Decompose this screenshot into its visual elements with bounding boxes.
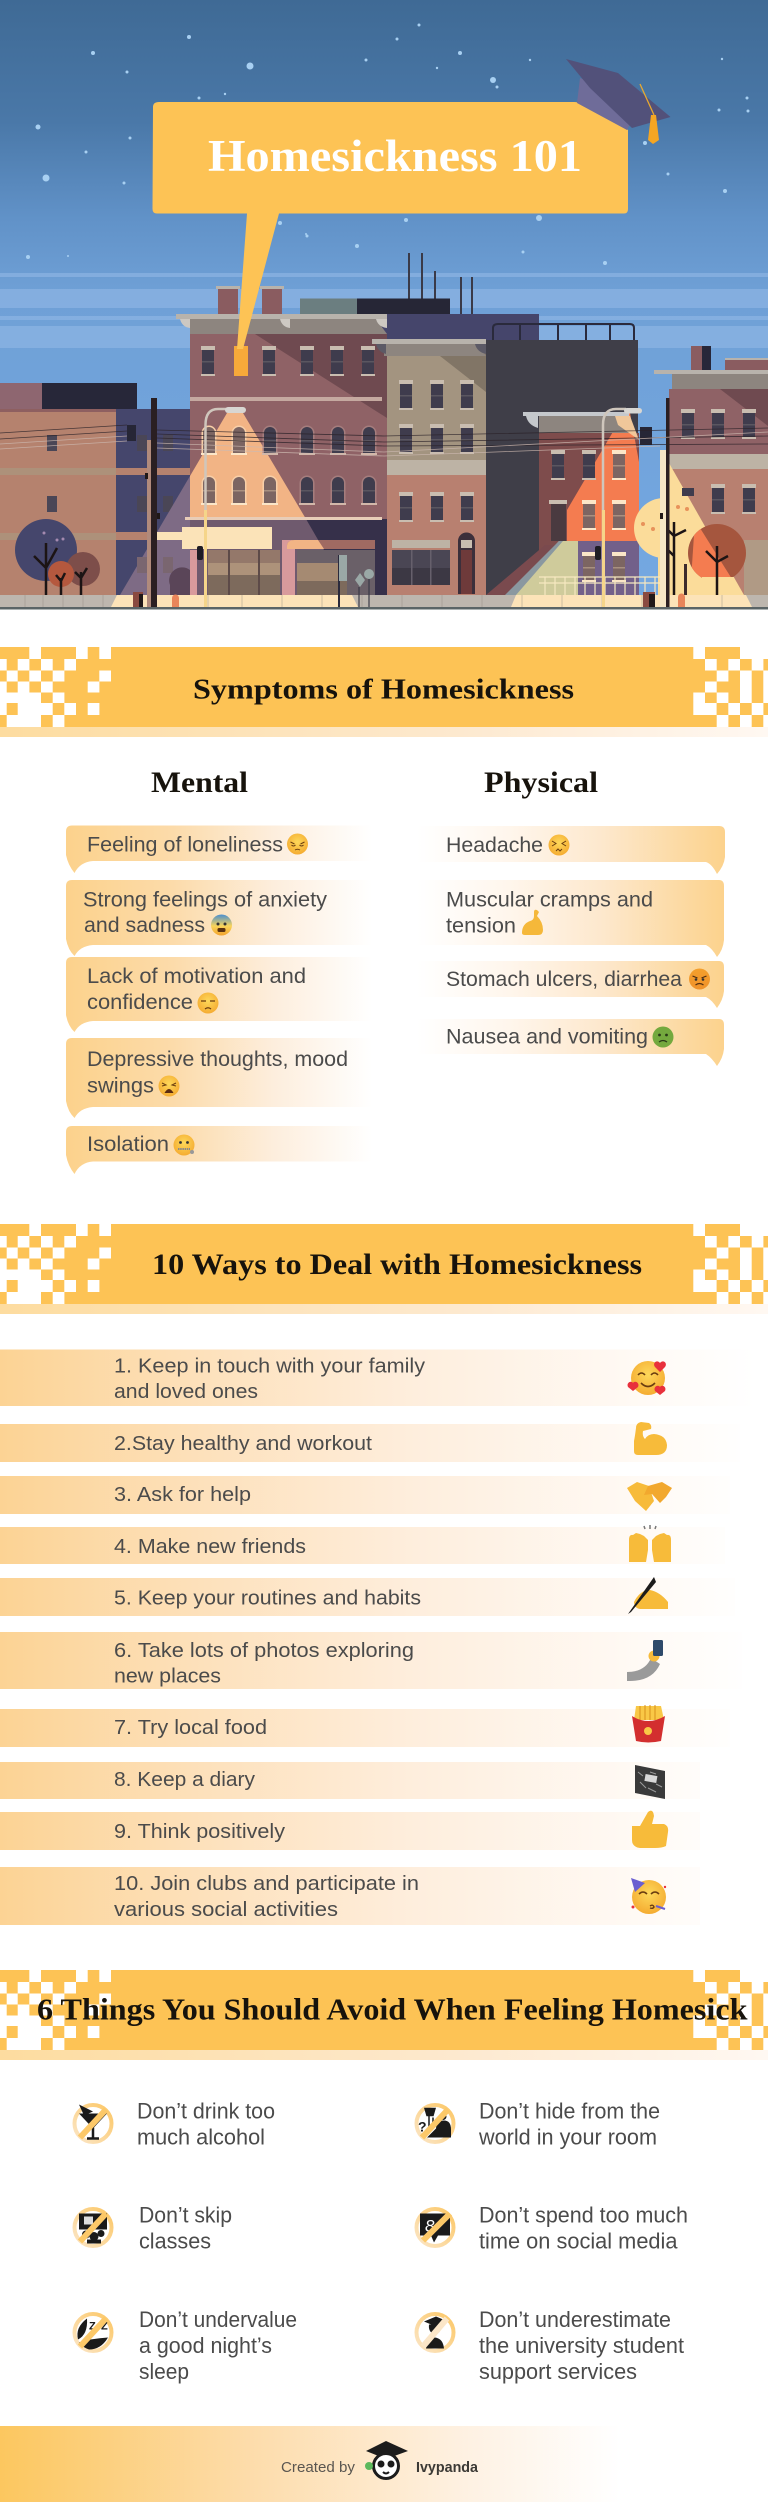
item: skip classes: classes [139,2228,211,2254]
right trees [668,520,746,595]
hydrants and bins [133,555,685,607]
antennae [408,253,473,315]
icon: no hiding in room: ? [418,2118,427,2134]
street light cone left [120,413,306,595]
panel: 10 ways to deal with homesickness [0,1224,768,1925]
row 6: new places [114,1664,221,1688]
item: sleep [74,2307,297,2384]
bubble: muscular cramps: Muscular cramps and [446,888,653,912]
chimneys [216,286,284,315]
steps and lit stoop [486,541,578,595]
emoji: french fries [632,1705,665,1742]
emoji: smiling face with hearts [628,1361,666,1395]
item: support services: support services [479,2359,637,2384]
item: sleep: Don’t undervalue [139,2307,297,2332]
right street light cone ground [634,450,694,595]
icon: no social media [416,2209,454,2246]
icon: no skipping classes [74,2209,112,2246]
bubble: depressive thoughts [66,1038,372,1118]
emoji: unamused [198,992,218,1014]
panel: 6 things to avoid [0,1970,768,2384]
item: hide from world: world in your room [478,2124,657,2150]
emoji: notebook [635,1765,665,1799]
emoji: confounded [548,834,570,856]
item: sleep: a good night’s [139,2333,272,2358]
emoji: partying face [631,1878,666,1914]
main brick building [176,314,387,596]
heading: mental: Mental [151,766,248,799]
storefront [157,517,387,596]
bubble: anxiety: Strong feelings of anxiety [83,888,328,912]
emoji: writing hand [628,1577,668,1614]
emoji: handshake [627,1482,672,1511]
item: skip classes [74,2202,232,2254]
emoji: anxious sweat [211,914,232,936]
row 7: 7. Try local food [114,1716,267,1739]
icon: no sleep neglect: Z [101,2320,108,2332]
credit text: Created by [281,2459,356,2476]
heading: symptoms: Symptoms of Homesickness [193,674,574,706]
row 7 [0,1705,730,1747]
main building upper windows [201,346,375,376]
bubble: loneliness: Feeling of loneliness [87,834,283,856]
fence [539,577,661,595]
purple and salmon buildings left [0,383,190,595]
overhead wires [0,425,768,456]
bubble: nausea [417,1019,724,1066]
heading: physical: Physical [484,766,598,799]
emoji: zipper mouth [174,1134,194,1156]
emoji: weary [158,1076,180,1096]
icon: no alcohol [74,2104,112,2142]
icon: no social media: 8 [425,2216,435,2236]
item: social media: Don’t spend too much [479,2202,688,2228]
row 5 [0,1577,735,1616]
bubble: motivation: confidence [87,991,193,1014]
row 6 [0,1632,742,1689]
bubble: isolation: Isolation [87,1133,169,1156]
street lamp left [197,407,246,607]
row 10 [0,1867,700,1925]
row 2: 2.Stay healthy and workout [114,1432,372,1455]
bubble: loneliness [66,826,372,873]
icon: ivypanda logo [365,2441,408,2478]
row 1: 1. Keep in touch with your family [114,1354,426,1378]
bubble: anxiety [66,880,372,956]
rooftop railing [493,324,634,340]
bubble: depressive thoughts: swings [87,1074,154,1098]
bubble: nausea: Nausea and vomiting [446,1026,648,1048]
bubble: muscular cramps: tension [446,914,516,938]
sky bands [0,273,768,348]
item: support services: the university student [479,2333,684,2358]
bubble: motivation [66,957,372,1032]
speech bubble with title [152,102,628,349]
bubble: headache: Headache [446,834,543,857]
row 6: 6. Take lots of photos exploring [114,1639,414,1662]
row 1 [0,1350,755,1406]
bubble: isolation [66,1126,372,1174]
icon: graduation cap with tassel [566,59,670,144]
row 10: 10. Join clubs and participate in [114,1872,419,1895]
title: Homesickness 101 [208,131,582,181]
section header band: 10 ways [0,1224,768,1314]
row 4 [0,1525,725,1564]
row 1: and loved ones [114,1380,258,1403]
item: support services [416,2307,684,2384]
row 3 [0,1476,730,1514]
item: alcohol [74,2098,275,2150]
tan townhouse [372,339,486,596]
bubble: headache [417,826,725,874]
icon: no ignoring support [416,2314,454,2351]
item: alcohol: Don’t drink too [137,2098,275,2124]
emoji: flexed bicep [522,910,543,935]
row 4: 4. Make new friends [114,1535,306,1558]
bubble: anxiety: and sadness [84,914,205,937]
panel: symptoms of homesickness [0,647,768,1174]
emoji: pensive [287,834,308,854]
brand name: Ivypanda [416,2459,479,2476]
item: skip classes: Don’t skip [139,2202,232,2228]
stars [26,24,750,265]
item: hide from world: Don’t hide from the [479,2098,660,2124]
left utility pole [127,398,160,607]
heading: 6 things: 6 Things You Should Avoid When Feeling Homesick [37,1992,748,2026]
item: hide from world [416,2098,660,2150]
bubble: stomach ulcers [417,961,724,1008]
bubble: stomach ulcers: Stomach ulcers, diarrhea [446,968,682,991]
panel: hero city illustration [0,0,768,610]
icon: no hiding in room [416,2105,454,2142]
emoji: raising hands [629,1525,671,1562]
row 3: 3. Ask for help [114,1483,251,1506]
icon: no sleep neglect [74,2314,112,2351]
item: alcohol: much alcohol [137,2124,265,2150]
emoji: thumbs up [632,1811,668,1848]
row 9: 9. Think positively [114,1820,286,1843]
bubble: motivation: Lack of motivation and [87,965,306,988]
footer [0,2426,768,2502]
dark grey building [486,340,638,595]
night sky [0,0,768,608]
row 2 [0,1422,740,1462]
bubble: muscular cramps [417,880,724,957]
roof blocks behind [300,298,539,341]
street lamp right [595,408,642,607]
sidewalk [0,595,768,610]
arched windows [201,426,377,505]
emoji: nauseated green [652,1026,674,1048]
right tall building [654,346,768,595]
row 9 [0,1811,700,1850]
row 5: 5. Keep your routines and habits [114,1586,421,1610]
row 8 [0,1762,700,1799]
emoji: flexed biceps [634,1422,667,1455]
section header band: 6 things [0,1970,768,2060]
item: support services: Don’t underestimate [479,2307,671,2332]
icon: no sleep neglect: Z [89,2320,96,2332]
row 10: various social activities [114,1898,338,1921]
item: sleep: sleep [139,2359,189,2384]
emoji: angry [689,968,710,990]
left trees [15,519,100,595]
item: social media: time on social media [479,2228,678,2254]
item: social media [416,2202,688,2254]
heading: 10 ways: 10 Ways to Deal with Homesickness [152,1248,642,1281]
row 8: 8. Keep a diary [114,1768,256,1791]
right brick townhouse [523,412,639,596]
section header band: symptoms [0,647,768,737]
bubble: depressive thoughts: Depressive thoughts, mood [87,1048,348,1071]
emoji: selfie [627,1640,663,1681]
right utility pole [640,398,670,607]
